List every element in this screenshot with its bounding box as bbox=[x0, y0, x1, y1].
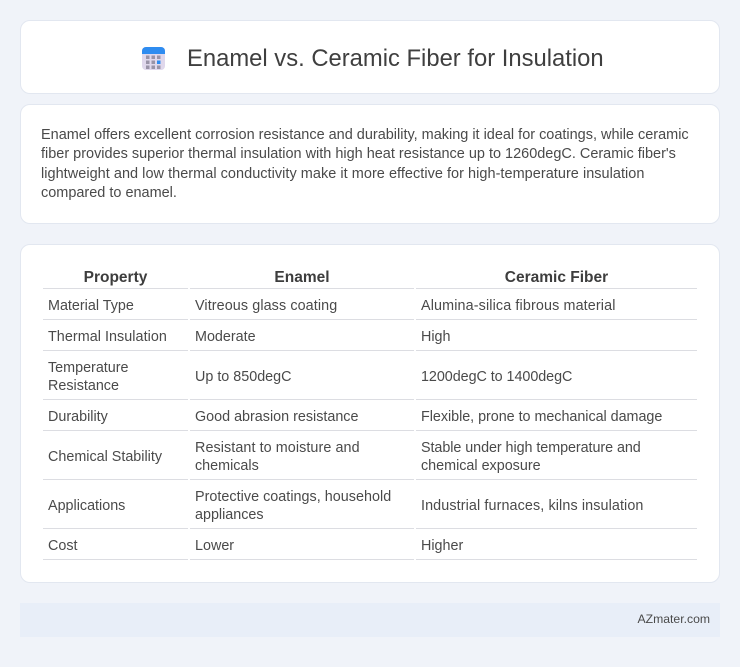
table row: temperature resistance: Resistance bbox=[48, 378, 119, 394]
table row: chemical stability: chemicals bbox=[195, 458, 259, 474]
title: Enamel vs. Ceramic Fiber for Insulation bbox=[187, 45, 604, 72]
table row: thermal insulation: Moderate bbox=[195, 329, 256, 345]
table row: material type: Material Type bbox=[48, 298, 134, 314]
table: header row: Property bbox=[84, 269, 147, 286]
table row: chemical stability bbox=[43, 440, 697, 480]
table row: chemical stability: chemical exposure bbox=[421, 458, 541, 474]
panel: title card bbox=[20, 20, 720, 94]
table row: material type: Vitreous glass coating bbox=[195, 298, 337, 314]
panel: comparison table bbox=[20, 244, 720, 583]
table row: temperature resistance: Temperature bbox=[48, 360, 129, 376]
table row: temperature resistance: Up to 850degC bbox=[195, 369, 292, 385]
table row: applications: Applications bbox=[48, 498, 125, 514]
table row: durability: Durability bbox=[48, 409, 108, 425]
table row: applications: appliances bbox=[195, 507, 264, 523]
table row: temperature resistance bbox=[43, 360, 697, 400]
table row: thermal insulation bbox=[43, 329, 697, 351]
table row: durability bbox=[43, 409, 697, 431]
table: header row bbox=[43, 269, 697, 289]
table row: durability: Good abrasion resistance bbox=[195, 409, 358, 425]
text block: summary bbox=[41, 127, 689, 201]
table row: cost: Cost bbox=[48, 538, 78, 554]
table row: thermal insulation: Thermal Insulation bbox=[48, 329, 167, 345]
table row: applications bbox=[43, 489, 697, 529]
table row: cost bbox=[43, 538, 697, 560]
table row: chemical stability: Resistant to moisture and bbox=[195, 440, 360, 456]
text block: summary: Enamel offers excellent corrosion resistance and durability, making it ideal for coatings, while ceramic bbox=[41, 127, 689, 143]
table row: durability: Flexible, prone to mechanical damage bbox=[421, 409, 662, 425]
table row: cost: Lower bbox=[195, 538, 234, 554]
table row: material type bbox=[43, 298, 697, 320]
table row: material type: Alumina-silica fibrous material bbox=[421, 298, 616, 314]
text block: summary: fiber provides superior thermal insulation with high heat resistance up to 1260degC. Ceramic fiber's bbox=[41, 146, 676, 162]
footer bar bbox=[20, 603, 720, 637]
table row: temperature resistance: 1200degC to 1400degC bbox=[421, 369, 572, 385]
table row: thermal insulation: High bbox=[421, 329, 450, 345]
table row: cost: Higher bbox=[421, 538, 463, 554]
table row: chemical stability: Stable under high temperature and bbox=[421, 440, 641, 456]
panel: summary bbox=[20, 104, 720, 224]
table row: applications: Industrial furnaces, kilns insulation bbox=[421, 498, 644, 514]
table: header row: Enamel bbox=[274, 269, 330, 286]
table row: chemical stability: Chemical Stability bbox=[48, 449, 162, 465]
text block: summary: lightweight and low thermal conductivity make it more effective for high-temperature insulation bbox=[41, 166, 644, 182]
footer text: AZmater.com bbox=[638, 612, 710, 626]
table row: applications: Protective coatings, household bbox=[195, 489, 391, 505]
text block: summary: compared to enamel. bbox=[41, 185, 177, 201]
icon: calendar bbox=[142, 47, 165, 70]
table: header row: Ceramic Fiber bbox=[505, 269, 608, 286]
